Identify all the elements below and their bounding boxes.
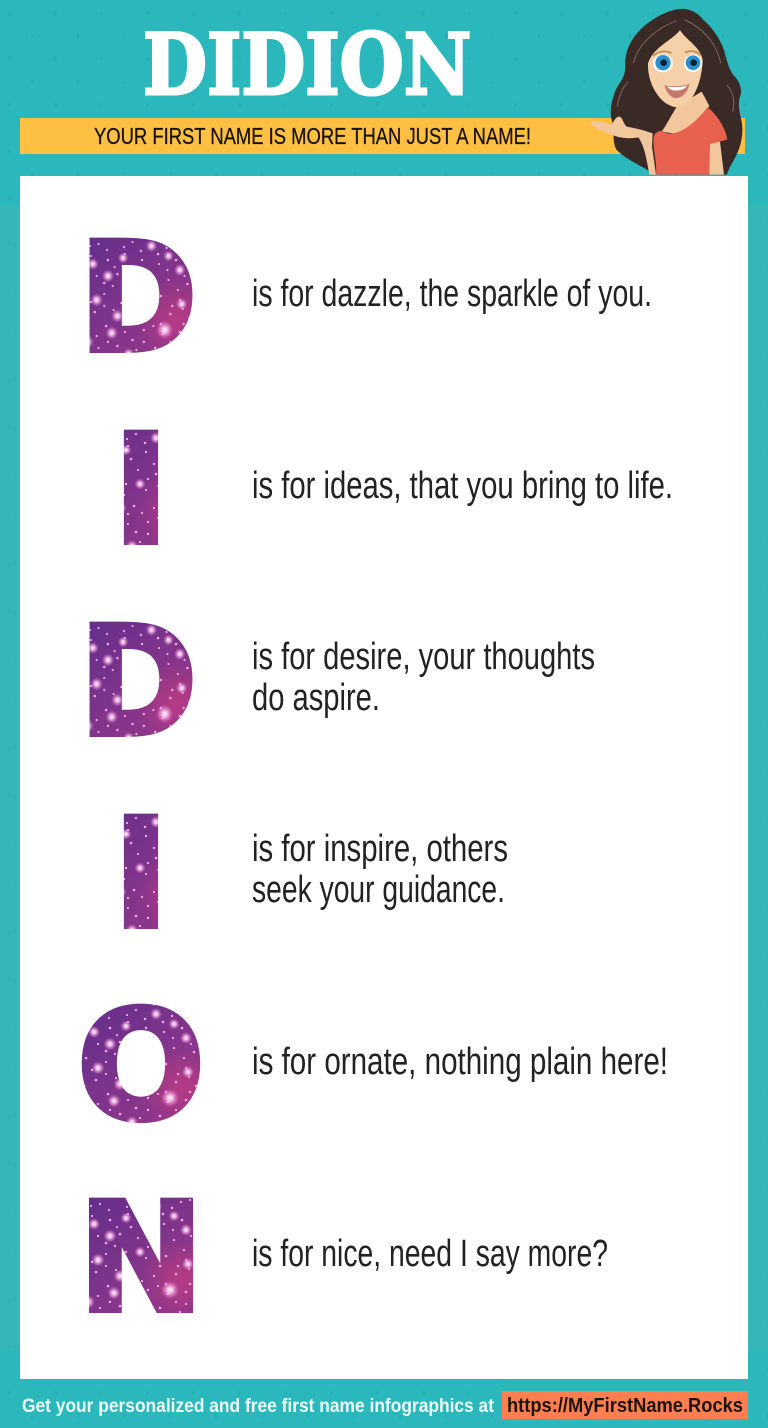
eyes [653, 51, 702, 72]
hand and forearm [590, 117, 656, 175]
line: nice: is for nice, need I say more? [252, 1233, 608, 1275]
row N: nice [78, 1172, 608, 1346]
neck and chest [662, 92, 709, 134]
row D: desire [79, 596, 595, 770]
hair [611, 9, 742, 175]
link text: https://MyFirstName.Rocks [507, 1395, 743, 1417]
letter N: N [78, 1172, 204, 1346]
tagline banner [20, 118, 745, 154]
line: inspire: is for inspire, others [252, 828, 508, 870]
row I: inspire [113, 788, 508, 962]
face [648, 30, 703, 107]
line: guidance: seek your guidance. [252, 869, 505, 911]
arm [709, 142, 724, 175]
side strip tint right [748, 205, 768, 1350]
tagline text: YOUR FIRST NAME IS MORE THAN JUST A NAME! [94, 123, 531, 149]
side strip tint left [0, 205, 20, 1350]
line: aspire: do aspire. [252, 677, 380, 719]
letter I: I [113, 788, 169, 962]
letter O: O [77, 980, 205, 1154]
hair highlights [617, 20, 734, 112]
row I: ideas [113, 404, 673, 578]
letter D: D [79, 212, 197, 386]
row O: ornate [77, 980, 668, 1154]
footer link badge [502, 1391, 748, 1419]
title: DIDION [143, 15, 471, 114]
letter I: I [113, 404, 169, 578]
icon: cartoon woman presenting [590, 9, 742, 175]
letter D: D [79, 596, 197, 770]
shirt [653, 107, 727, 175]
panel: white content card [20, 176, 748, 1379]
smile [665, 84, 689, 98]
row D: dazzle [79, 212, 652, 386]
line: desire: is for desire, your thoughts [252, 636, 595, 678]
footer call to action: Get your personalized and free first name infographics at [22, 1396, 495, 1417]
